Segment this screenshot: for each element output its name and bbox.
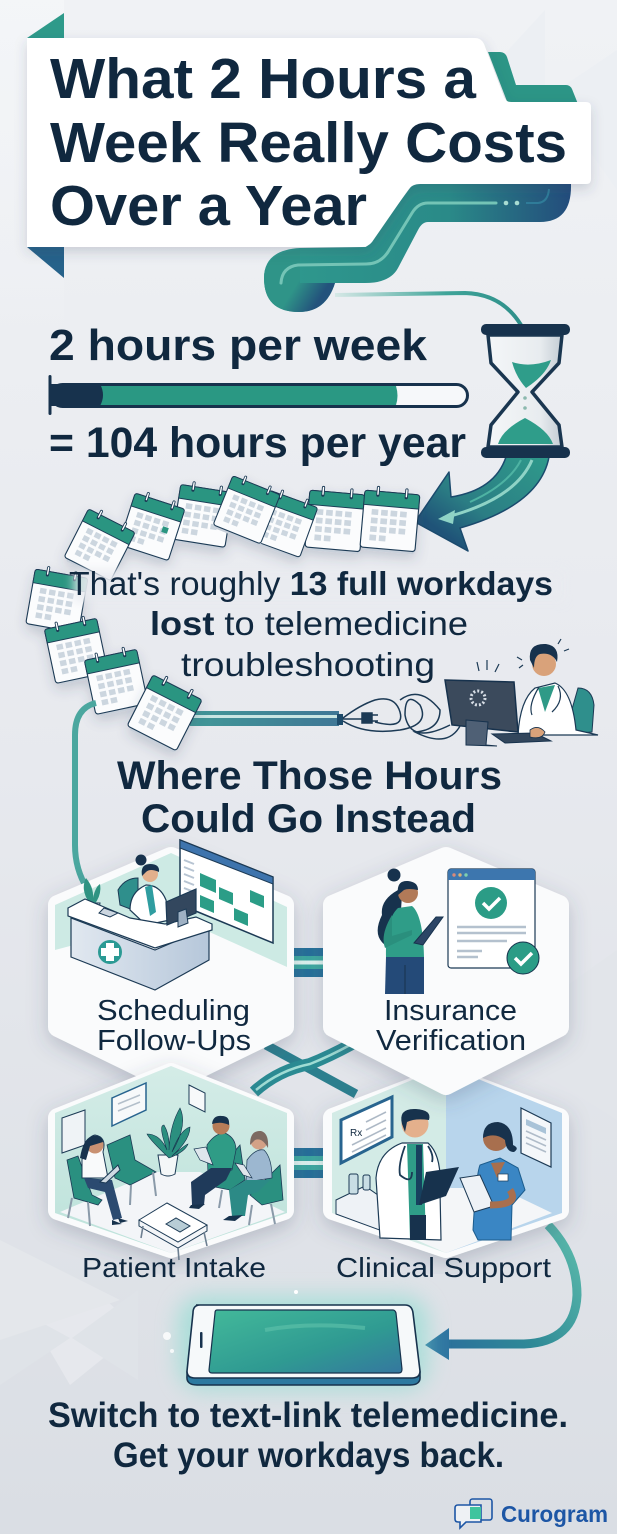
heading: 2 hours per week: 2 hours per week <box>49 321 428 370</box>
heading: 104 hours per year: = 104 hours per year <box>49 419 466 467</box>
logo: Curogram: Curogram <box>501 1501 608 1527</box>
icon: poster <box>521 1108 551 1167</box>
icon: reception desk <box>68 889 212 990</box>
icon: verification document <box>448 869 539 974</box>
label: clinical support: Clinical Support <box>336 1252 551 1283</box>
icon: coffee table <box>139 1203 207 1260</box>
title: Week Really Costs <box>50 111 567 175</box>
text: 13 workdays lost: lost to telemedicine <box>150 605 468 642</box>
icon: woman reading <box>80 1135 128 1225</box>
icon: wall chart: Rx <box>350 1128 362 1139</box>
swoosh under title <box>264 184 571 325</box>
call to action <box>48 1395 568 1475</box>
cable from calendars to computer <box>190 694 462 739</box>
fade behind wording <box>74 570 564 602</box>
icon: chairs <box>67 1135 283 1226</box>
label: scheduling follow-ups: Scheduling <box>97 995 250 1027</box>
hexagon panel: clinical support <box>332 1066 562 1253</box>
icon: woman with tablet <box>378 868 443 994</box>
title: What 2 Hours a <box>50 47 477 111</box>
text: 13 workdays lost: That's roughly 13 full workdays <box>69 565 553 602</box>
logo: Curogram <box>455 1499 608 1528</box>
connectors between hexagons <box>254 948 356 1178</box>
icon: woman on right <box>223 1131 272 1221</box>
heading: where those hours could go instead <box>117 754 502 841</box>
heading: where those hours could go instead: Could Go Instead <box>141 797 476 841</box>
doctor at computer <box>445 639 598 746</box>
call to action: Switch to text-link telemedicine. <box>48 1395 568 1435</box>
label: patient intake: Patient Intake <box>82 1252 266 1283</box>
calendar: last one on cable <box>126 672 205 754</box>
arrow from hourglass to calendars <box>415 457 549 551</box>
calendars: falling row <box>63 473 421 584</box>
icon: man reading <box>189 1116 236 1209</box>
icon: hourglass <box>481 324 570 458</box>
call to action: Get your workdays back. <box>113 1435 504 1475</box>
teal connector to scheduling hexagon <box>75 703 96 890</box>
label: insurance verification: Insurance <box>384 995 517 1027</box>
progress bar <box>48 375 468 415</box>
hexagon panel: insurance verification <box>333 857 559 1085</box>
label: scheduling follow-ups: Follow-Ups <box>97 1025 251 1057</box>
calendars: left stack <box>25 565 150 717</box>
text: 13 workdays lost: troubleshooting <box>181 646 435 683</box>
title panel <box>27 38 591 247</box>
icon: plant <box>147 1108 190 1176</box>
icon: receptionist <box>118 854 170 925</box>
icon: nurse <box>460 1122 525 1240</box>
icon: wall chart <box>341 1097 392 1163</box>
hexagon panel: patient intake <box>55 1066 287 1260</box>
icon: doctor <box>376 1109 459 1240</box>
icon: plant <box>84 878 100 918</box>
arrow to phone <box>425 1225 577 1360</box>
icon: schedule screen <box>180 840 273 943</box>
heading: where those hours could go instead: Where Those Hours <box>117 754 502 798</box>
icon: wall frames <box>62 1083 205 1153</box>
text: 13 workdays lost <box>69 565 553 683</box>
label: insurance verification: Verification <box>376 1025 526 1057</box>
hexagon panel: scheduling follow-ups <box>55 840 287 1082</box>
icon: glowing phone <box>163 1290 428 1390</box>
decorative ribbon behind title <box>27 13 578 278</box>
title: Over a Year <box>50 174 367 238</box>
label: insurance verification <box>376 995 526 1057</box>
label: scheduling follow-ups <box>97 995 251 1057</box>
icon: counter with bottles <box>336 1174 385 1232</box>
title <box>50 47 567 238</box>
